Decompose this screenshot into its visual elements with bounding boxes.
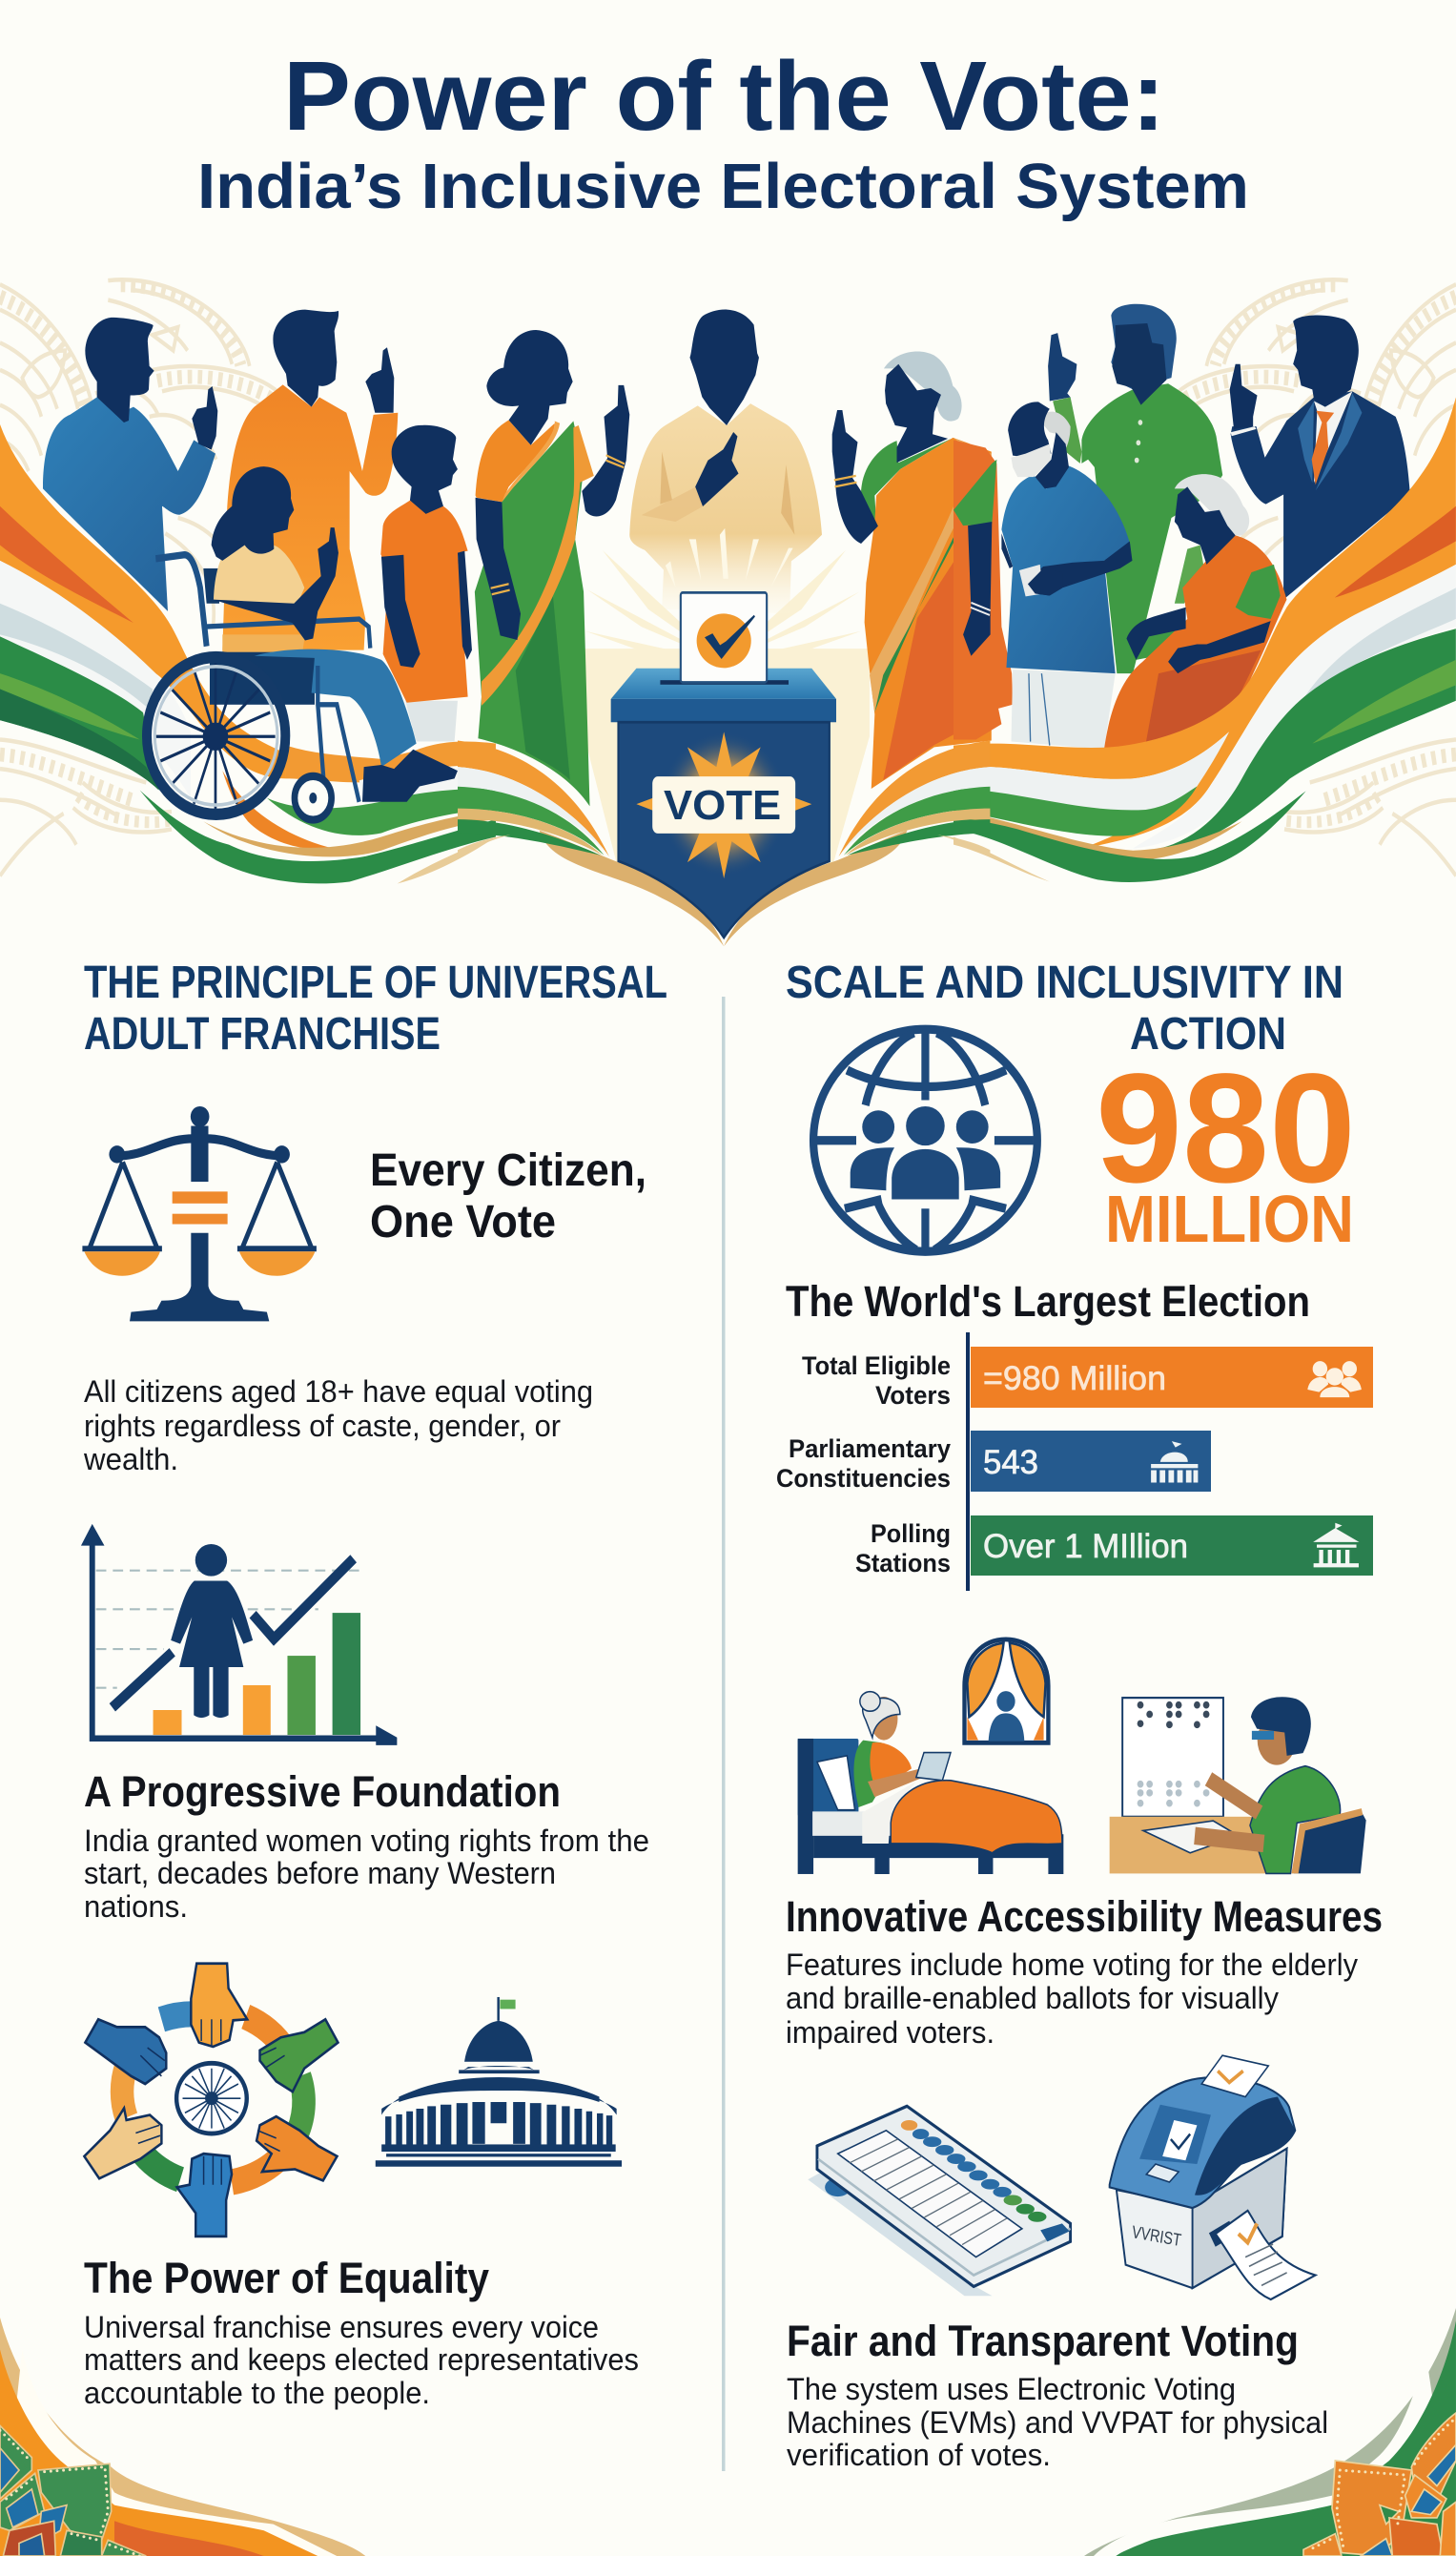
gold swoosh under box — [540, 831, 907, 946]
tricolour waves right — [954, 397, 1456, 882]
icon: woman with rising bar chart — [81, 1524, 397, 1745]
text: equal voting rights: rights regardless of caste, gender, or — [84, 1409, 561, 1443]
person: woman in green sari — [475, 330, 629, 806]
bar label: parliamentary constituencies — [776, 1434, 951, 1493]
text: equal voting rights: All citizens aged 18+ have equal voting — [84, 1374, 593, 1409]
person: elderly seated woman in orange sari — [1104, 474, 1286, 751]
text: fair and transparent voting: The system uses Electronic Voting — [787, 2372, 1236, 2406]
window with curtains — [965, 1639, 1048, 1742]
bar label: polling stations: Stations — [855, 1549, 951, 1577]
bar: over 1 million — [971, 1515, 1373, 1576]
ribbon ends beside ballot box, right — [839, 741, 990, 856]
bar label: total eligible voters: Voters — [875, 1381, 951, 1410]
text: the power of equality: Universal franchise ensures every voice — [84, 2310, 599, 2344]
text: fair and transparent voting — [787, 2317, 1328, 2472]
text: innovative accessibility measures: and braille-enabled ballots for visually — [786, 1981, 1279, 2015]
heading: universal adult franchise — [84, 958, 667, 1060]
person: man in cream kurta voting — [629, 310, 822, 613]
heading: scale and inclusivity in action: ACTION — [1130, 1009, 1286, 1060]
person: man in green kurta — [1048, 304, 1222, 673]
icon: globe with people — [813, 1029, 1037, 1251]
heading: the world's largest election: The World's Largest Election — [786, 1277, 1310, 1326]
bar chart — [776, 1332, 1373, 1591]
callout: every citizen, one vote: One Vote — [370, 1197, 556, 1247]
callout: every citizen, one vote: Every Citizen, — [370, 1145, 646, 1196]
heading: scale and inclusivity in action: SCALE AND INCLUSIVITY IN — [786, 958, 1343, 1008]
panel: scale and inclusivity — [776, 958, 1383, 2472]
bar: 980 million: =980 Million — [983, 1360, 1166, 1397]
light rays behind ballot — [584, 550, 870, 868]
person: elderly man in blue shirt — [1001, 402, 1132, 750]
text: the power of equality: matters and keeps elected representatives — [84, 2342, 639, 2377]
panel: universal adult franchise — [81, 958, 667, 2410]
icon: home voting in bed with window — [798, 1639, 1063, 1874]
bar label: total eligible voters: Total Eligible — [802, 1351, 951, 1380]
stat: 980 million: MILLION — [1105, 1182, 1354, 1256]
bar: 543 — [971, 1431, 1211, 1492]
person: man in orange kurta — [222, 310, 398, 650]
bar label: parliamentary constituencies: Constituencies — [776, 1464, 951, 1493]
bar label: polling stations: Polling — [871, 1519, 951, 1548]
text: innovative accessibility measures: Features include home voting for the elderly — [786, 1948, 1358, 1982]
stat: 980 million: 980 — [1096, 1041, 1356, 1215]
title — [197, 41, 1249, 222]
ballot box with voting slip and VOTE label: VOTE — [664, 783, 781, 829]
title: Power of the Vote: — [283, 41, 1165, 151]
ornamental mandala left — [0, 279, 279, 876]
heading: scale and inclusivity in action — [786, 958, 1343, 1060]
wheelchair with seated woman — [147, 466, 458, 820]
icon: six hands around chakra — [84, 1964, 338, 2236]
icon: braille ballot voter — [1110, 1697, 1366, 1873]
text: fair and transparent voting: Machines (EVMs) and VVPAT for physical — [787, 2405, 1328, 2440]
text: a progressive foundation: nations. — [84, 1889, 188, 1924]
icon: VVPAT machine — [1110, 2055, 1316, 2299]
text: innovative accessibility measures: impaired voters. — [786, 2015, 995, 2050]
person: child in orange shirt — [380, 425, 472, 742]
bar: 543: 543 — [983, 1444, 1038, 1481]
icon: VVPAT machine: VVRIST — [1131, 2221, 1183, 2250]
ribbon ends beside ballot box, left — [458, 741, 609, 856]
text: a progressive foundation: start, decades before many Western — [84, 1856, 556, 1890]
ornamental mandala right — [1177, 279, 1456, 876]
ballot box with voting slip and VOTE label — [611, 592, 836, 938]
bar: 980 million — [971, 1347, 1373, 1408]
text: equal voting rights: wealth. — [83, 1442, 178, 1476]
icon: scales of justice — [82, 1106, 317, 1321]
subtitle: India’s Inclusive Electoral System — [197, 151, 1249, 222]
column divider — [722, 997, 725, 2471]
person: man in blue kurta — [43, 318, 217, 611]
text: a progressive foundation: India granted women voting rights from the — [84, 1824, 649, 1858]
text: a progressive foundation — [84, 1767, 649, 1924]
corner decoration bottom right — [1084, 2308, 1456, 2556]
callout: every citizen, one vote — [370, 1145, 646, 1247]
text: innovative accessibility measures — [786, 1892, 1383, 2050]
bar label: parliamentary constituencies: Parliamentary — [789, 1434, 951, 1463]
heading: universal adult franchise: ADULT FRANCHISE — [84, 1009, 441, 1060]
bar: over 1 million: Over 1 MIllion — [983, 1528, 1188, 1565]
hero illustration — [0, 279, 1456, 946]
person: woman in orange sari with grey hair — [832, 352, 1013, 789]
bar label: total eligible voters — [802, 1351, 951, 1410]
corner decoration bottom left — [0, 2318, 365, 2556]
text: fair and transparent voting: verification of votes. — [787, 2438, 1051, 2472]
icon: electronic voting machine — [808, 2106, 1071, 2296]
text: the power of equality: The Power of Equality — [84, 2254, 489, 2302]
text: equal voting rights — [83, 1374, 593, 1476]
text: the power of equality — [84, 2254, 639, 2410]
person: suited man — [1230, 316, 1410, 600]
text: a progressive foundation: A Progressive Foundation — [84, 1767, 561, 1816]
tricolour waves left — [0, 424, 496, 883]
text: the power of equality: accountable to the people. — [84, 2376, 430, 2410]
icon: parliament building — [376, 1997, 622, 2167]
heading: universal adult franchise: THE PRINCIPLE OF UNIVERSAL — [84, 958, 667, 1008]
bar label: polling stations — [855, 1519, 951, 1577]
text: fair and transparent voting: Fair and Transparent Voting — [787, 2317, 1299, 2365]
